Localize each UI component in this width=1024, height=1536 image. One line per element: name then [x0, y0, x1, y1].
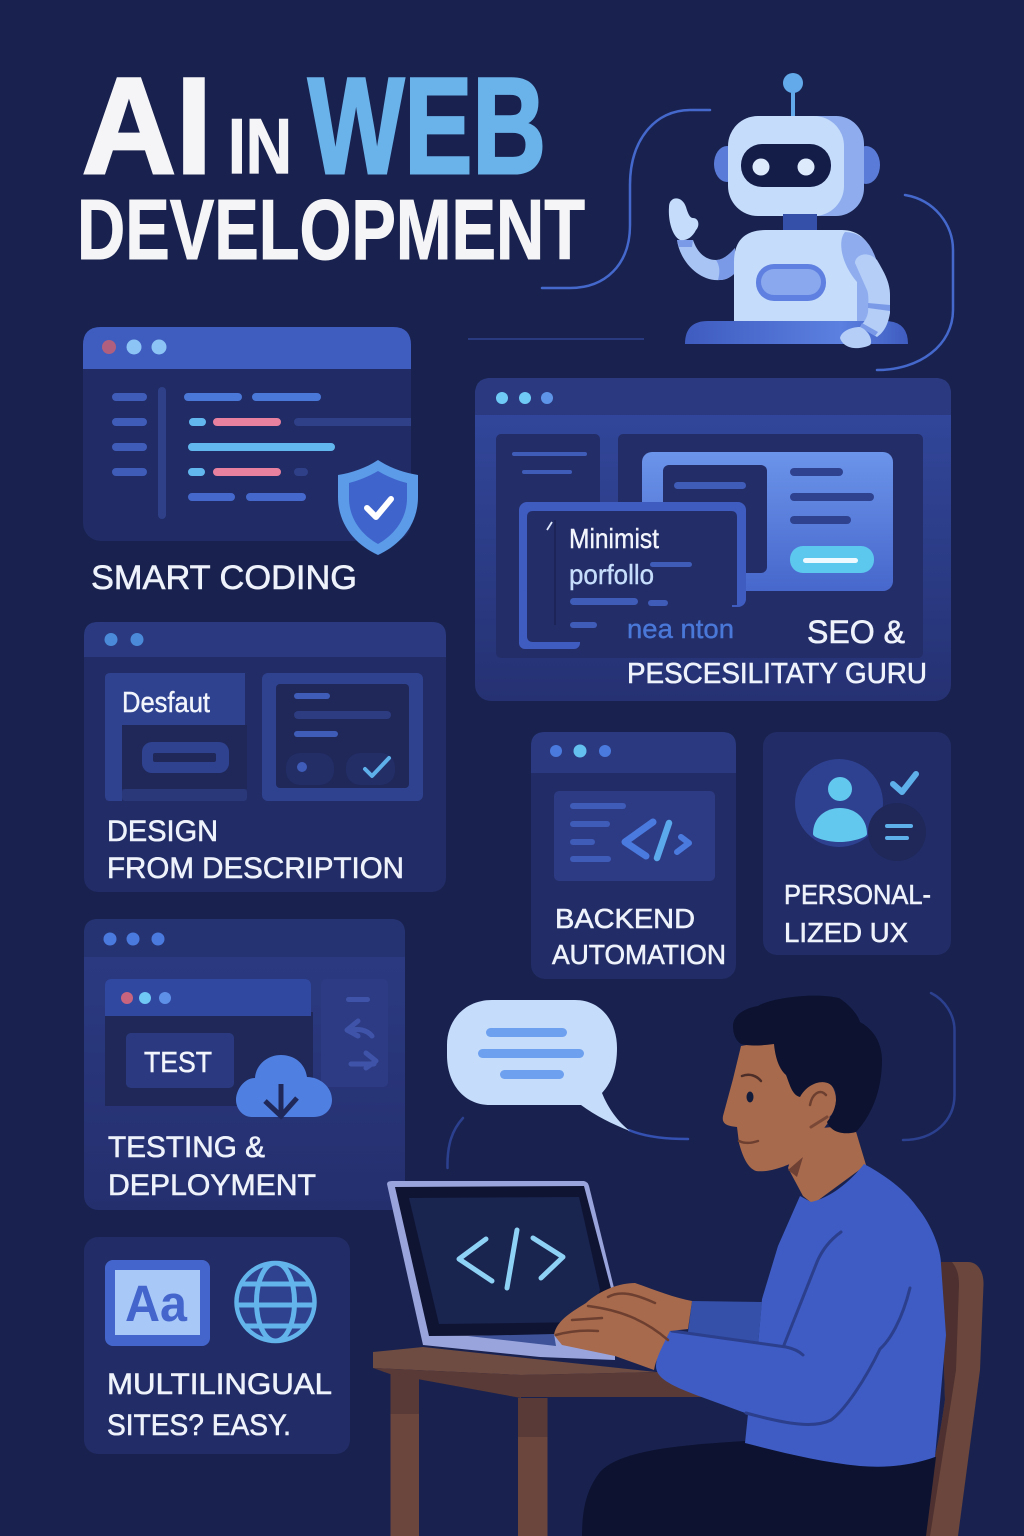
robot base	[685, 321, 908, 344]
robot neck	[783, 214, 817, 234]
robot ears	[714, 146, 880, 184]
label: sites easy: SITES? EASY.	[107, 1409, 291, 1442]
front editor window	[519, 502, 746, 658]
icon: Aa language: Aa	[125, 1275, 188, 1332]
robot left arm and hand	[669, 198, 735, 280]
icon: Aa language	[105, 1260, 210, 1346]
desk legs	[390, 1374, 548, 1536]
laptop keyboard	[468, 1334, 556, 1346]
inner browser	[105, 979, 313, 1106]
hands	[554, 1283, 692, 1370]
sweater torso	[745, 1164, 946, 1467]
label: from description: FROM DESCRIPTION	[107, 852, 404, 885]
desk top	[373, 1347, 656, 1375]
window dots	[102, 340, 166, 354]
window dots	[104, 932, 164, 946]
side toolbar	[321, 979, 388, 1087]
pants	[582, 1441, 936, 1536]
hair	[733, 996, 882, 1133]
label: pescesilitaty guru: PESCESILITATY GURU	[627, 658, 927, 690]
window header	[84, 622, 446, 657]
left pane	[496, 434, 600, 658]
icon: code symbol on screen	[459, 1230, 563, 1288]
title word: IN: IN	[228, 102, 292, 190]
sweater creases	[672, 1232, 910, 1424]
title	[77, 50, 585, 278]
icon: check mark	[893, 774, 916, 792]
face	[723, 1040, 830, 1171]
editor text: Minimist: Minimist	[569, 523, 659, 554]
title line: DEVELOPMENT: DEVELOPMENT	[77, 183, 585, 278]
ear	[804, 1079, 836, 1121]
icon: code brackets	[625, 822, 689, 858]
window header	[531, 732, 736, 773]
right pane	[618, 434, 923, 658]
icon: globe	[232, 1263, 319, 1341]
mockup text: Desfaut: Desfaut	[122, 687, 210, 719]
right mockup	[262, 673, 423, 801]
robot torso	[734, 230, 880, 321]
rear sleeve	[688, 1301, 762, 1345]
panel: backend automation	[531, 732, 736, 979]
label: personal-: PERSONAL-	[784, 879, 931, 910]
neck	[788, 1125, 866, 1204]
window header	[84, 919, 405, 957]
desk front edge	[373, 1368, 705, 1398]
robot head	[728, 116, 864, 216]
laptop screen	[409, 1197, 600, 1324]
decorative bracket: right of person	[903, 993, 954, 1140]
panel: personalized ux	[763, 732, 951, 955]
label: testing: TESTING &	[108, 1131, 265, 1164]
icon: robot	[669, 73, 908, 348]
laptop bezel	[395, 1186, 612, 1336]
code lines	[116, 391, 420, 515]
panel: testing and deployment	[84, 919, 405, 1210]
label: deployment: DEPLOYMENT	[108, 1169, 316, 1202]
speech bubble	[447, 1000, 630, 1131]
panel: multilingual sites	[84, 1237, 350, 1454]
code block	[554, 791, 715, 881]
robot belly panel	[756, 264, 826, 301]
robot antenna	[783, 73, 803, 118]
window body	[475, 378, 951, 701]
label: design: DESIGN	[107, 815, 218, 848]
panel: SEO	[475, 378, 951, 701]
window body	[84, 622, 446, 892]
label: backend: BACKEND	[555, 903, 695, 934]
label: smart coding: SMART CODING	[91, 559, 357, 597]
icon: shield	[338, 460, 418, 555]
window header	[475, 378, 951, 415]
window dots	[496, 392, 553, 404]
label: automation: AUTOMATION	[552, 939, 726, 970]
title word: AI: AI	[82, 50, 212, 203]
window body	[83, 327, 411, 541]
decorative curve: below speech bubble	[629, 1130, 688, 1139]
faded text: nea nton: nea nton	[627, 614, 734, 644]
chair	[905, 1262, 984, 1536]
panel: smart coding	[83, 327, 420, 555]
window dots	[550, 744, 611, 758]
window header	[83, 327, 411, 369]
editor text: porfollo: porfollo	[569, 559, 654, 590]
panel: design from description	[84, 622, 446, 892]
desk	[373, 1347, 705, 1536]
front sleeve	[656, 1331, 881, 1425]
window body	[531, 732, 736, 979]
title word: WEB: WEB	[308, 50, 546, 203]
decorative curve: right of robot	[877, 195, 953, 370]
window dots	[104, 633, 144, 646]
light preview card	[642, 452, 893, 591]
laptop	[387, 1181, 615, 1360]
left mockup	[105, 673, 247, 801]
window body	[84, 919, 405, 1210]
icon: cloud download	[236, 1055, 332, 1117]
person	[554, 996, 946, 1536]
label: multilingual: MULTILINGUAL	[107, 1368, 332, 1401]
facial features	[739, 1075, 827, 1143]
laptop lid	[387, 1181, 615, 1360]
label: SEO: SEO &	[807, 614, 905, 650]
icon: user avatar	[795, 759, 926, 861]
neck shadow	[788, 1157, 803, 1177]
decorative curve: left of robot	[542, 110, 710, 288]
underline below robot	[468, 338, 644, 340]
browser text: test: TEST	[144, 1047, 212, 1079]
decorative curve: left of laptop	[447, 1118, 463, 1168]
robot shoulder shade	[841, 232, 880, 321]
robot right arm and hand	[840, 254, 890, 348]
label: lized ux: LIZED UX	[784, 917, 908, 948]
